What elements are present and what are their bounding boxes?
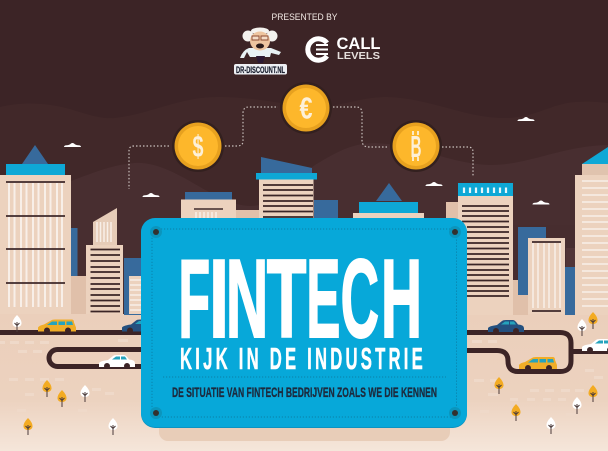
- car: yellow wagon right: [519, 357, 557, 371]
- building: centre right: [314, 183, 424, 221]
- title: FINTECH: [178, 237, 422, 361]
- title: FINTECH: H: [381, 237, 422, 361]
- dotted connector lines: [129, 107, 473, 189]
- logo: dr-discount: DR-DISCOUNT.NL: [236, 65, 285, 75]
- building: centre left: [181, 192, 260, 221]
- coin: euro: [280, 82, 332, 134]
- clouds: [64, 117, 550, 204]
- tagline: DE SITUATIE VAN FINTECH BEDRIJVEN ZOALS WE DIE KENNEN: [172, 384, 437, 400]
- logo: call levels: CALL: [336, 34, 380, 53]
- building: right cluster: [513, 225, 575, 315]
- logo: dr-discount: [234, 28, 287, 75]
- building: right tower: [446, 183, 513, 315]
- car: blue right: [488, 320, 524, 334]
- trees: white: [12, 315, 587, 435]
- title: FINTECH: T: [267, 237, 306, 361]
- title: FINTECH: I: [209, 237, 229, 361]
- car: blue left: [122, 320, 158, 334]
- coin: bitcoin: [390, 120, 442, 172]
- building: centre tower: [256, 157, 317, 220]
- title: FINTECH: N: [226, 237, 268, 361]
- title: FINTECH: F: [178, 237, 210, 361]
- ground paving patches: [0, 339, 603, 416]
- coin: euro: €: [300, 90, 312, 126]
- presented by label: PRESENTED BY: [272, 12, 338, 22]
- hills: far range: [0, 97, 608, 320]
- logo: call levels: [308, 34, 380, 62]
- car: white right: [582, 339, 608, 353]
- building: far right tower: [575, 147, 608, 315]
- coin: dollar: $: [192, 128, 204, 164]
- car: yellow wagon left: [38, 320, 76, 334]
- building: left tower: [0, 145, 71, 314]
- panel shadow: [159, 380, 450, 441]
- road network: [0, 332, 608, 372]
- title: FINTECH: E: [306, 237, 340, 361]
- title panel: [141, 218, 467, 428]
- ground: [0, 314, 608, 451]
- car: white left: [99, 355, 135, 369]
- trees: yellow: [23, 312, 598, 435]
- title: FINTECH: C: [341, 237, 379, 361]
- coin: bitcoin: B: [410, 129, 422, 164]
- logo: call levels: LEVELS: [337, 51, 380, 62]
- coin: dollar: [172, 120, 224, 172]
- hills: near range: [71, 143, 608, 320]
- building: left midrise: [71, 208, 142, 315]
